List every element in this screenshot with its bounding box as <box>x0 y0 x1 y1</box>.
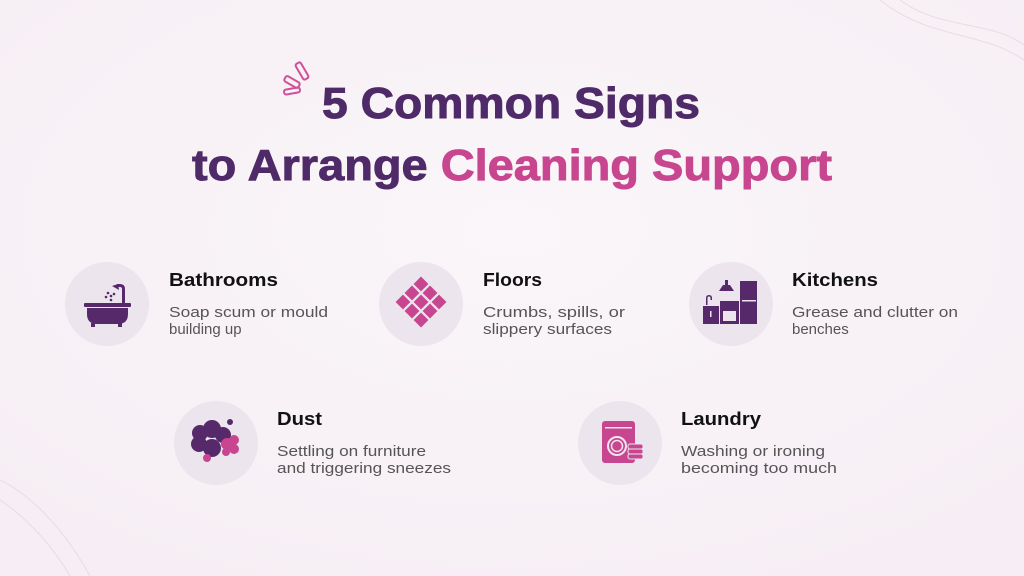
title: 5 Common Signs <box>322 79 700 128</box>
panel: bathrooms: Bathrooms <box>169 270 278 290</box>
panel: kitchens: Kitchens <box>792 270 878 290</box>
panel: floors <box>379 262 625 346</box>
panel: floors: slippery surfaces <box>483 321 612 338</box>
panel: bathrooms <box>65 262 328 346</box>
title <box>192 79 832 190</box>
icon: dust clouds <box>191 419 239 462</box>
panel: laundry: Washing or ironing <box>681 443 825 460</box>
panel: bathrooms: building up <box>169 321 242 338</box>
panel: dust: Dust <box>277 409 322 429</box>
panel: dust: and triggering sneezes <box>277 460 451 477</box>
panel: floors: Floors <box>483 270 542 290</box>
icon: bathtub <box>84 284 131 327</box>
icon: tiles <box>396 277 446 327</box>
panel: bathrooms: Soap scum or mould <box>169 304 328 321</box>
panel: kitchens <box>689 262 958 346</box>
panel: floors: Crumbs, spills, or <box>483 304 625 321</box>
panel: dust: Settling on furniture <box>277 443 426 460</box>
panel: kitchens: benches <box>792 321 849 338</box>
title: to Arrange Cleaning Support <box>192 141 832 190</box>
icon: kitchen <box>703 280 757 324</box>
panel: laundry: Laundry <box>681 409 761 429</box>
panel: dust <box>174 401 451 485</box>
panel: kitchens: Grease and clutter on <box>792 304 958 321</box>
icon: sparkle accent <box>284 62 309 95</box>
icon: washing machine <box>602 421 643 463</box>
panel: laundry: becoming too much <box>681 460 837 477</box>
panel: laundry <box>578 401 837 485</box>
